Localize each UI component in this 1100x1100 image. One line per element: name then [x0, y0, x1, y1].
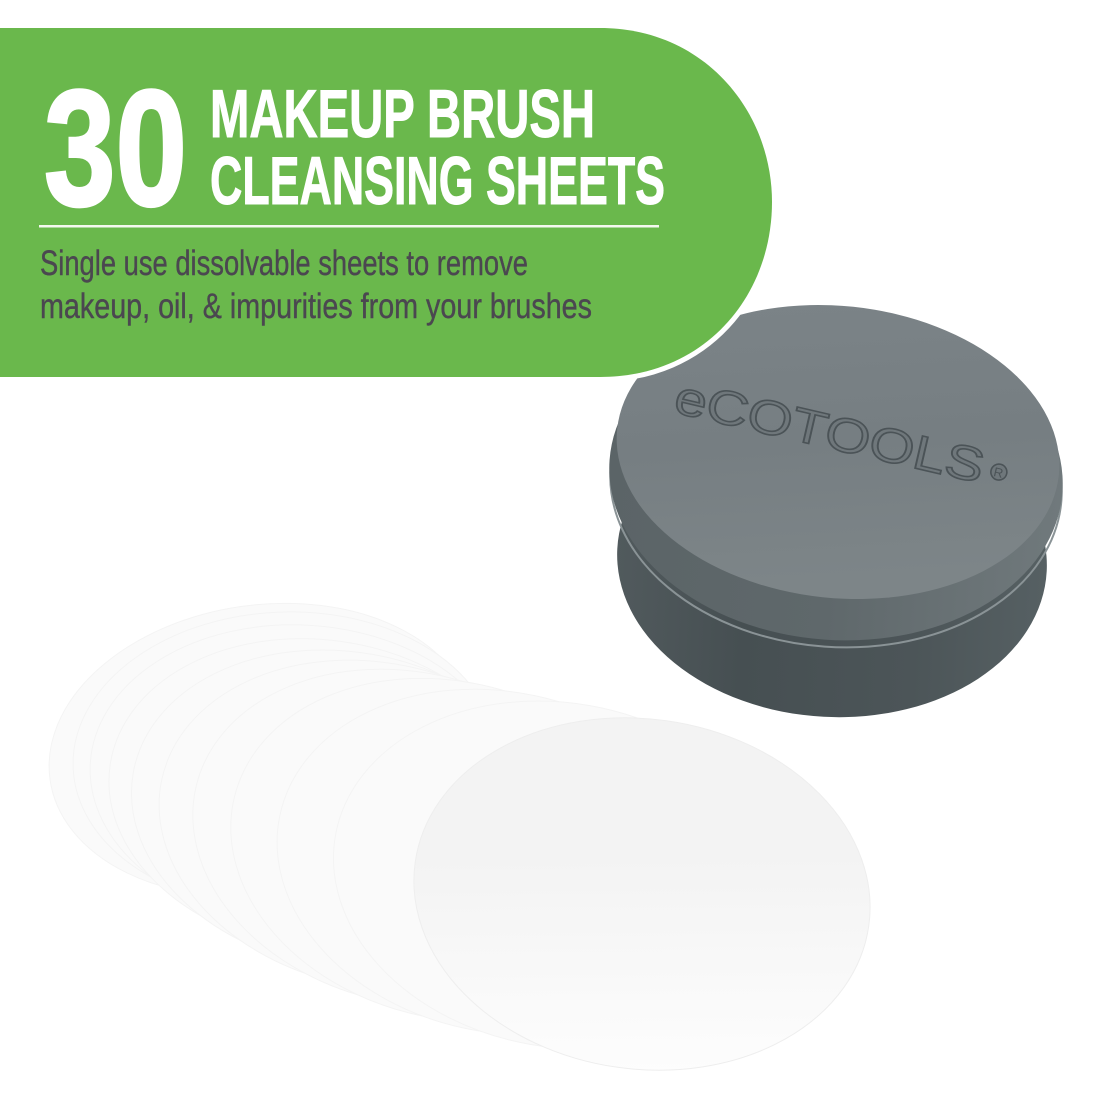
heading line one: MAKEUP BRUSH — [210, 76, 595, 152]
green banner — [0, 28, 772, 377]
embossed logo: eCOTOOLS — [670, 371, 989, 494]
banner shape — [0, 28, 772, 377]
number 30: 30 — [44, 56, 187, 240]
back sheets — [30, 577, 814, 1084]
sheets stack — [30, 577, 893, 1099]
embossed logo — [670, 371, 1013, 499]
divider — [39, 225, 659, 228]
embossed logo: R — [992, 464, 1005, 481]
front sheet — [391, 689, 893, 1099]
tin lid top — [602, 284, 1074, 620]
description line two: makeup, oil, & impurities from your brushes — [40, 287, 592, 326]
tin base — [609, 392, 1055, 728]
description line one: Single use dissolvable sheets to remove — [40, 244, 528, 283]
heading line two: CLEANSING SHEETS — [210, 143, 665, 219]
tin lid side — [598, 297, 1074, 655]
tin — [598, 284, 1074, 728]
tin rim highlight — [599, 306, 1073, 662]
